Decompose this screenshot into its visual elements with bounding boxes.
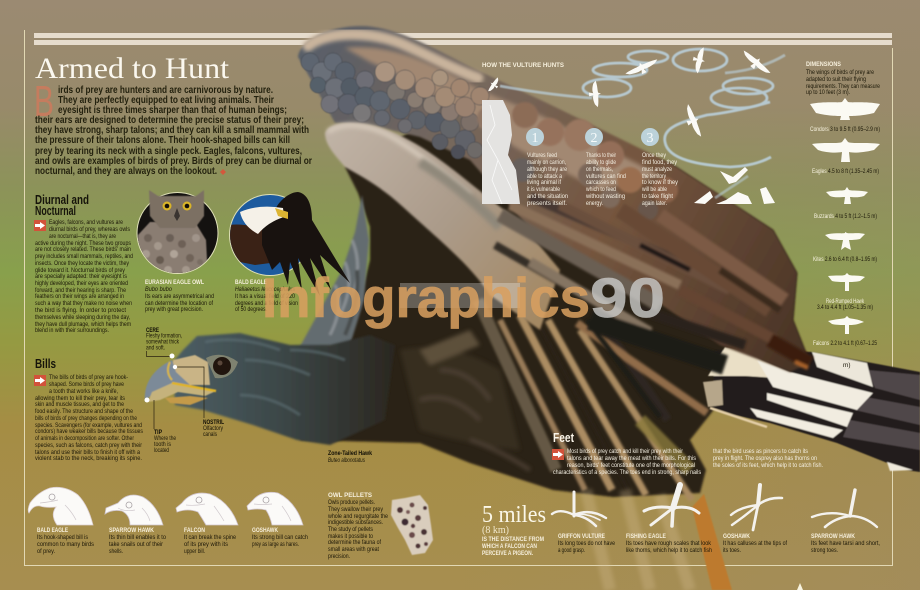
icon: falcon silhouette (828, 316, 864, 334)
intro text: they have strong, sharp talons; and they can kill a small mammal with (35, 125, 309, 136)
text: bald eagle: of prey. (37, 548, 55, 555)
text: sparrow hawk: Its thin bill enables it to (109, 534, 166, 541)
callout: nostril: canals (203, 431, 217, 438)
section: bills: species, such as falcons, catch prey with their (35, 442, 143, 449)
icon: pellet (391, 495, 433, 555)
panel: feet: talons and tear away the meat with their bills. For this (567, 455, 696, 462)
step 1: presents itself. (527, 200, 567, 207)
step 3: the territory (642, 173, 667, 180)
section: diurnal and nocturnal: are specially adapted: their eyesight is (35, 273, 127, 280)
panel: dimensions: The wings of birds of prey are (806, 69, 874, 76)
panel: how the vulture hunts (482, 46, 785, 207)
panel: owl pellets: small areas with great (328, 546, 379, 553)
step 2 (585, 128, 626, 207)
panel: sparrow hawk foot: SPARROW HAWK (811, 533, 855, 540)
dark body and underwing (300, 100, 810, 497)
icon: kite silhouette (825, 232, 865, 250)
icon: sparrow hawk head (105, 495, 163, 525)
faded feather tips (586, 490, 690, 590)
panel: dimensions: m) (843, 362, 850, 369)
panel: dimensions: Falcons 2.2 to 4.1 ft (0.67–1.25 (813, 340, 877, 347)
panel: fishing eagle foot (626, 485, 712, 554)
step 1: mainly on carrion, (527, 159, 566, 166)
callout: cere: CERE (146, 327, 160, 334)
drop cap: B (34, 77, 54, 126)
icon: goshawk head (247, 492, 303, 525)
panel: owl pellets: makes it possible to (328, 533, 373, 540)
secondary feathers (495, 197, 810, 417)
panel: feet: Feet (553, 431, 575, 445)
tan feather mass (345, 47, 660, 190)
section: diurnal and nocturnal: feathers on their wings are arranged in (35, 293, 124, 300)
step 3: will be able (641, 186, 667, 193)
section: diurnal and nocturnal: themselves while sleeping during the day, (35, 314, 130, 321)
section: bills: talons and use their bills to finish it off with a (35, 449, 140, 456)
panel: dimensions (806, 61, 880, 369)
panel: dimensions: Condors 3 to 9.5 ft (0.95–2.9 m) (810, 126, 880, 133)
panel: goshawk foot: its toes. (723, 547, 741, 554)
panel: owl pellets (327, 492, 433, 560)
section: bills (34, 357, 143, 462)
panel: sparrow hawk foot (811, 490, 880, 554)
callout: nostril: Olfactory (203, 425, 224, 432)
cream leading edge (308, 34, 478, 78)
panel: bird bills (28, 487, 308, 555)
callout: tip: tooth is (154, 441, 171, 448)
panel: fishing eagle foot: like thorns, which help it to catch fish (626, 547, 712, 554)
watermark: Infographics (262, 266, 590, 329)
section: diurnal and nocturnal: highly developed, their eyes are oriented (35, 280, 128, 287)
icon: condor silhouette (810, 98, 880, 120)
section: bills: allowing them to kill their prey, tear its (35, 395, 125, 402)
section: bills: bills of birds of prey changes depending on the (35, 415, 137, 422)
text: goshawk: Its strong bill can catch (252, 534, 308, 541)
step 2: which to feed (585, 186, 616, 193)
step 3: must analyze (642, 166, 672, 173)
icon: red-rumped hawk silhouette (828, 273, 865, 291)
icon: goshawk claw (731, 485, 782, 530)
intro text: prey by tearing its neck with a single peck. Eagles, falcons, vultures, (35, 146, 302, 157)
panel: sparrow hawk foot: strong toes. (811, 547, 838, 554)
panel: goshawk foot (723, 485, 787, 554)
stat: 5 miles: IS THE DISTANCE FROM (482, 536, 544, 543)
labels: owl and eagle captions (145, 279, 298, 313)
panel: owl pellets: The study of pellets (328, 526, 373, 533)
panel: griffon vulture foot (552, 492, 615, 554)
section: diurnal and nocturnal: such a way that they make no noise when (35, 300, 132, 307)
step 3: to take flight (642, 193, 673, 200)
callout: cere: somewhat thick (146, 338, 180, 346)
panel: owl pellets: precision. (328, 553, 350, 560)
icon: sparrow hawk claw (812, 490, 877, 527)
panel: dimensions: Buzzards 4 to 5 ft (1.2–1.5 m) (814, 213, 877, 220)
section: diurnal and nocturnal: Eagles, falcons, and vultures are (49, 219, 123, 226)
intro text: the pressure of their talons alone. Their hook-shaped bills can kill (35, 135, 290, 146)
labels: owl and eagle captions: Haliaeetus leucocephalus (235, 286, 296, 293)
section: bills: condors) have weaker bills because the tissues (35, 428, 143, 435)
icon: fishing eagle claw (644, 485, 699, 526)
callout: cere: and soft. (146, 344, 165, 352)
text: bald eagle: common to many birds (37, 541, 94, 548)
panel: feet: reason, birds' feet constitute one of the morphological (567, 462, 695, 469)
step 3: again later. (642, 200, 667, 207)
section: bills: shaped. Some birds of prey have (49, 381, 124, 388)
section: diurnal and nocturnal: the bird is flying. In order to protect (35, 307, 126, 314)
text: sparrow hawk: shells. (109, 548, 123, 555)
body texture (400, 330, 530, 470)
panel: dimensions: 3.4 to 4.4 ft (1.05–1.35 m) (817, 304, 873, 311)
panel: dimensions: DIMENSIONS (806, 61, 841, 68)
panel: griffon vulture foot: a good grasp. (558, 547, 585, 554)
section: bills: violent stab to the neck, breaking its spine. (35, 455, 142, 462)
panel: dimensions: Eagles 4.5 to 8 ft (1.35–2.45 m) (812, 168, 879, 175)
panel: sparrow hawk foot: Its feet have tarsi and short, (811, 540, 880, 547)
panel: dimensions: Kites 2.6 to 6.4 ft (0.8–1.95 m) (813, 256, 877, 263)
text: bald eagle: BALD EAGLE (37, 527, 68, 534)
step 3: find food, they (642, 159, 678, 166)
section: bills: skin and muscle tissues, and get to the (35, 401, 124, 408)
section: diurnal and nocturnal (34, 193, 133, 334)
icon: white marker at bottom edge (797, 583, 803, 590)
section: diurnal and nocturnal: prey includes small mammals, reptiles, and (35, 253, 133, 260)
callout: tip: located (154, 447, 169, 454)
wing band (325, 123, 560, 330)
step 1: 1 (532, 131, 538, 146)
section: bills: Bills (35, 357, 56, 371)
text: bald eagle (37, 527, 94, 555)
text: goshawk (252, 527, 308, 548)
icon: red arrow badge (552, 449, 564, 460)
text: falcon: upper bill. (184, 548, 205, 555)
panel: owl pellets: whole and regurgitate the (327, 513, 388, 520)
panel: griffon vulture foot: GRIFFON VULTURE (558, 533, 605, 540)
text: falcon: of its prey with its (184, 541, 228, 548)
text: sparrow hawk (109, 527, 166, 555)
labels: owl and eagle captions: It has a visual field of 220 (235, 293, 295, 300)
icon: vultures in flight (486, 46, 775, 204)
panel: feet: Most birds of prey catch and kill their prey with their (567, 448, 684, 455)
callout: nostril: NOSTRIL (203, 419, 224, 426)
panel: owl pellets: indigestible substances. (328, 519, 383, 526)
panel: feet: the soles of its feet, which help it to catch fish. (713, 462, 823, 469)
step 2: Thanks to their (586, 152, 617, 159)
callout: cere: Fleshy formation, (146, 332, 182, 340)
step 3: to know if they (642, 179, 679, 186)
icon: bald eagle head (28, 487, 93, 525)
text: sparrow hawk: SPARROW HAWK (109, 527, 154, 534)
upper wing (298, 26, 810, 372)
section: diurnal and nocturnal: active during the night. These two groups (35, 240, 131, 247)
labels: owl and eagle captions: Bubo bubo (145, 286, 172, 293)
step 2: on thermals, (586, 166, 613, 173)
section: diurnal and nocturnal: are nocturnal—that is, they are (49, 233, 116, 240)
panel: goshawk foot: It has calluses at the tips of (723, 540, 787, 547)
labels: owl and eagle captions: EURASIAN EAGLE OWL (145, 279, 204, 286)
hawk head (145, 333, 395, 445)
section: diurnal and nocturnal: Nocturnal (35, 204, 76, 218)
photo: bald eagle (228, 192, 350, 296)
text: sparrow hawk: take snails out of their (109, 541, 164, 548)
step 2: 2 (590, 131, 598, 146)
callout: tip (144, 398, 176, 454)
section: diurnal and nocturnal: they have dull plumage, which helps them (35, 321, 131, 328)
head feather texture (205, 340, 345, 415)
step 2: energy. (586, 200, 603, 207)
step 3: Once they (642, 152, 667, 159)
step 2: carcasses on (586, 179, 616, 186)
stat: 5 miles: WHICH A FALCON CAN (482, 543, 537, 550)
flight path (500, 49, 785, 198)
panel: dimensions: adapted to suit their flying (806, 76, 866, 83)
panel: how the vulture hunts: HOW THE VULTURE HUNTS (482, 62, 565, 69)
callout: tip: Where the (154, 435, 176, 442)
step 2: ability to glide (586, 159, 616, 166)
intro text: their ears are designed to determine the precise status of their prey; (35, 115, 304, 126)
intro text (34, 77, 312, 177)
orange feather shaft (692, 494, 732, 590)
step 2: vultures can find (586, 173, 626, 180)
stat: 5 miles: 5 miles (482, 502, 546, 528)
stat: 5 miles (482, 502, 546, 557)
tail (703, 347, 920, 472)
intro text: and owls are examples of birds of prey. Birds of prey can be diurnal or (35, 156, 312, 167)
panel: owl pellets: determine the fauna of (328, 539, 381, 546)
step 1 (526, 128, 568, 207)
panel: owl pellets: They swallow their prey (328, 506, 384, 513)
text: goshawk: GOSHAWK (252, 527, 278, 534)
panel: feet: that the bird uses as pincers to catch its (713, 448, 808, 455)
panel: dimensions: requirements. They can measure (806, 83, 880, 90)
callout: cere (146, 327, 182, 358)
step 3 (641, 128, 679, 207)
section: diurnal and nocturnal: forward, and their hearing is sharp. The (35, 287, 126, 294)
callout: tip: TIP (154, 429, 163, 436)
grey neck feathers (298, 195, 369, 350)
text: goshawk: prey as large as hares. (252, 541, 299, 548)
labels: owl and eagle captions: degrees and a field of vision (235, 300, 298, 307)
icon: red arrow badge (34, 375, 46, 386)
panel: fishing eagle foot: FISHING EAGLE (626, 533, 666, 540)
labels: owl and eagle captions: Its ears are asymmetrical and (145, 293, 214, 300)
tan coverts (477, 102, 678, 220)
callout: nostril (173, 365, 224, 438)
text: falcon: FALCON (184, 527, 205, 534)
step 2: without wasting (585, 193, 625, 200)
labels: owl and eagle captions: prey with great precision. (145, 306, 203, 313)
section: bills: food easily. The structure and shape of the (35, 408, 133, 415)
intro text: irds of prey are hunters and are carnivorous by nature. (58, 85, 273, 96)
section: diurnal and nocturnal: blend in with their surroundings. (35, 327, 109, 334)
labels: owl and eagle captions: can determine the location of (145, 300, 213, 307)
step 1: although they are (527, 166, 567, 173)
title: Armed to Hunt (35, 52, 230, 85)
beak (145, 355, 216, 405)
text: bald eagle: Its hook-shaped bill is (37, 534, 88, 541)
icon: griffon claw (552, 492, 606, 526)
icon: eagle silhouette (812, 138, 880, 162)
section: bills: a tooth that works like a knife, (49, 388, 118, 395)
icon: buzzard silhouette (826, 187, 868, 204)
step 3: 3 (646, 131, 654, 146)
intro text: They are perfectly equipped to eat living animals. Their (58, 95, 274, 106)
section: diurnal and nocturnal: are not closely related. These birds' main (35, 246, 131, 253)
section: diurnal and nocturnal: diurnal birds of prey, whereas owls (49, 226, 130, 233)
labels: owl and eagle captions: BALD EAGLE (235, 279, 267, 286)
intro text: eyesight is three times sharper than that of human beings; (58, 105, 287, 116)
stat: 5 miles: (8 km) (482, 525, 509, 536)
section: diurnal and nocturnal: glide toward it. Nocturnal birds of prey (35, 267, 126, 274)
panel: griffon vulture foot: Its long toes do not have (558, 540, 615, 547)
photo: eurasian eagle owl (135, 190, 218, 280)
step 1: living animal if (527, 179, 561, 186)
text: falcon: It can break the spine (184, 534, 236, 541)
panel: feet: characteristics of a species. The toes end in strong, sharp nails (553, 469, 701, 476)
lower flight feather fan (478, 300, 707, 500)
watermark: 90 (590, 266, 665, 329)
panel: owl pellets: OWL PELLETS (328, 492, 372, 499)
step 1: it is vulnerable (527, 186, 560, 193)
labels: owl and eagle captions: of 50 degrees. (235, 306, 267, 313)
section: diurnal and nocturnal: insects. Once they locate the victim, they (35, 260, 130, 267)
panel: feet (552, 431, 823, 476)
section: bills: The bills of birds of prey are hook- (49, 374, 128, 381)
section: diurnal and nocturnal: Diurnal and (35, 193, 89, 207)
icon: red arrow badge (34, 220, 46, 231)
panel: dimensions: up to 10 feet (3 m). (806, 89, 850, 96)
panel: goshawk foot: GOSHAWK (723, 533, 750, 540)
intro text: nocturnal, and they are always on the lookout. (35, 166, 217, 177)
eye (206, 355, 238, 378)
icon: cliff (482, 100, 520, 204)
panel: feet: prey in flight. The osprey also has thorns on (713, 455, 817, 462)
caption: zone-tailed hawk (328, 450, 372, 464)
stat: 5 miles: PERCEIVE A PIGEON. (482, 550, 533, 557)
section: bills: species. Scavengers (for example, vultures and (35, 422, 142, 429)
step 1: able to attack a (527, 173, 562, 180)
icon: falcon head (176, 493, 238, 525)
panel: dimensions: Red-Rumped Hawk (826, 298, 865, 305)
step 1: Vultures feed (527, 152, 557, 159)
slate coverts (301, 53, 489, 159)
panel: fishing eagle foot: Its toes have rough scales that look (626, 540, 712, 547)
text: falcon (184, 527, 236, 555)
section: bills: of animals in decomposition are softer. Other (35, 435, 135, 442)
caption: zone-tailed hawk: Buteo albonotatus (328, 457, 366, 464)
step 1: and the situation (527, 193, 568, 200)
panel: owl pellets: Owls produce pellets. (328, 499, 375, 506)
caption: zone-tailed hawk: Zone-Tailed Hawk (328, 450, 372, 457)
